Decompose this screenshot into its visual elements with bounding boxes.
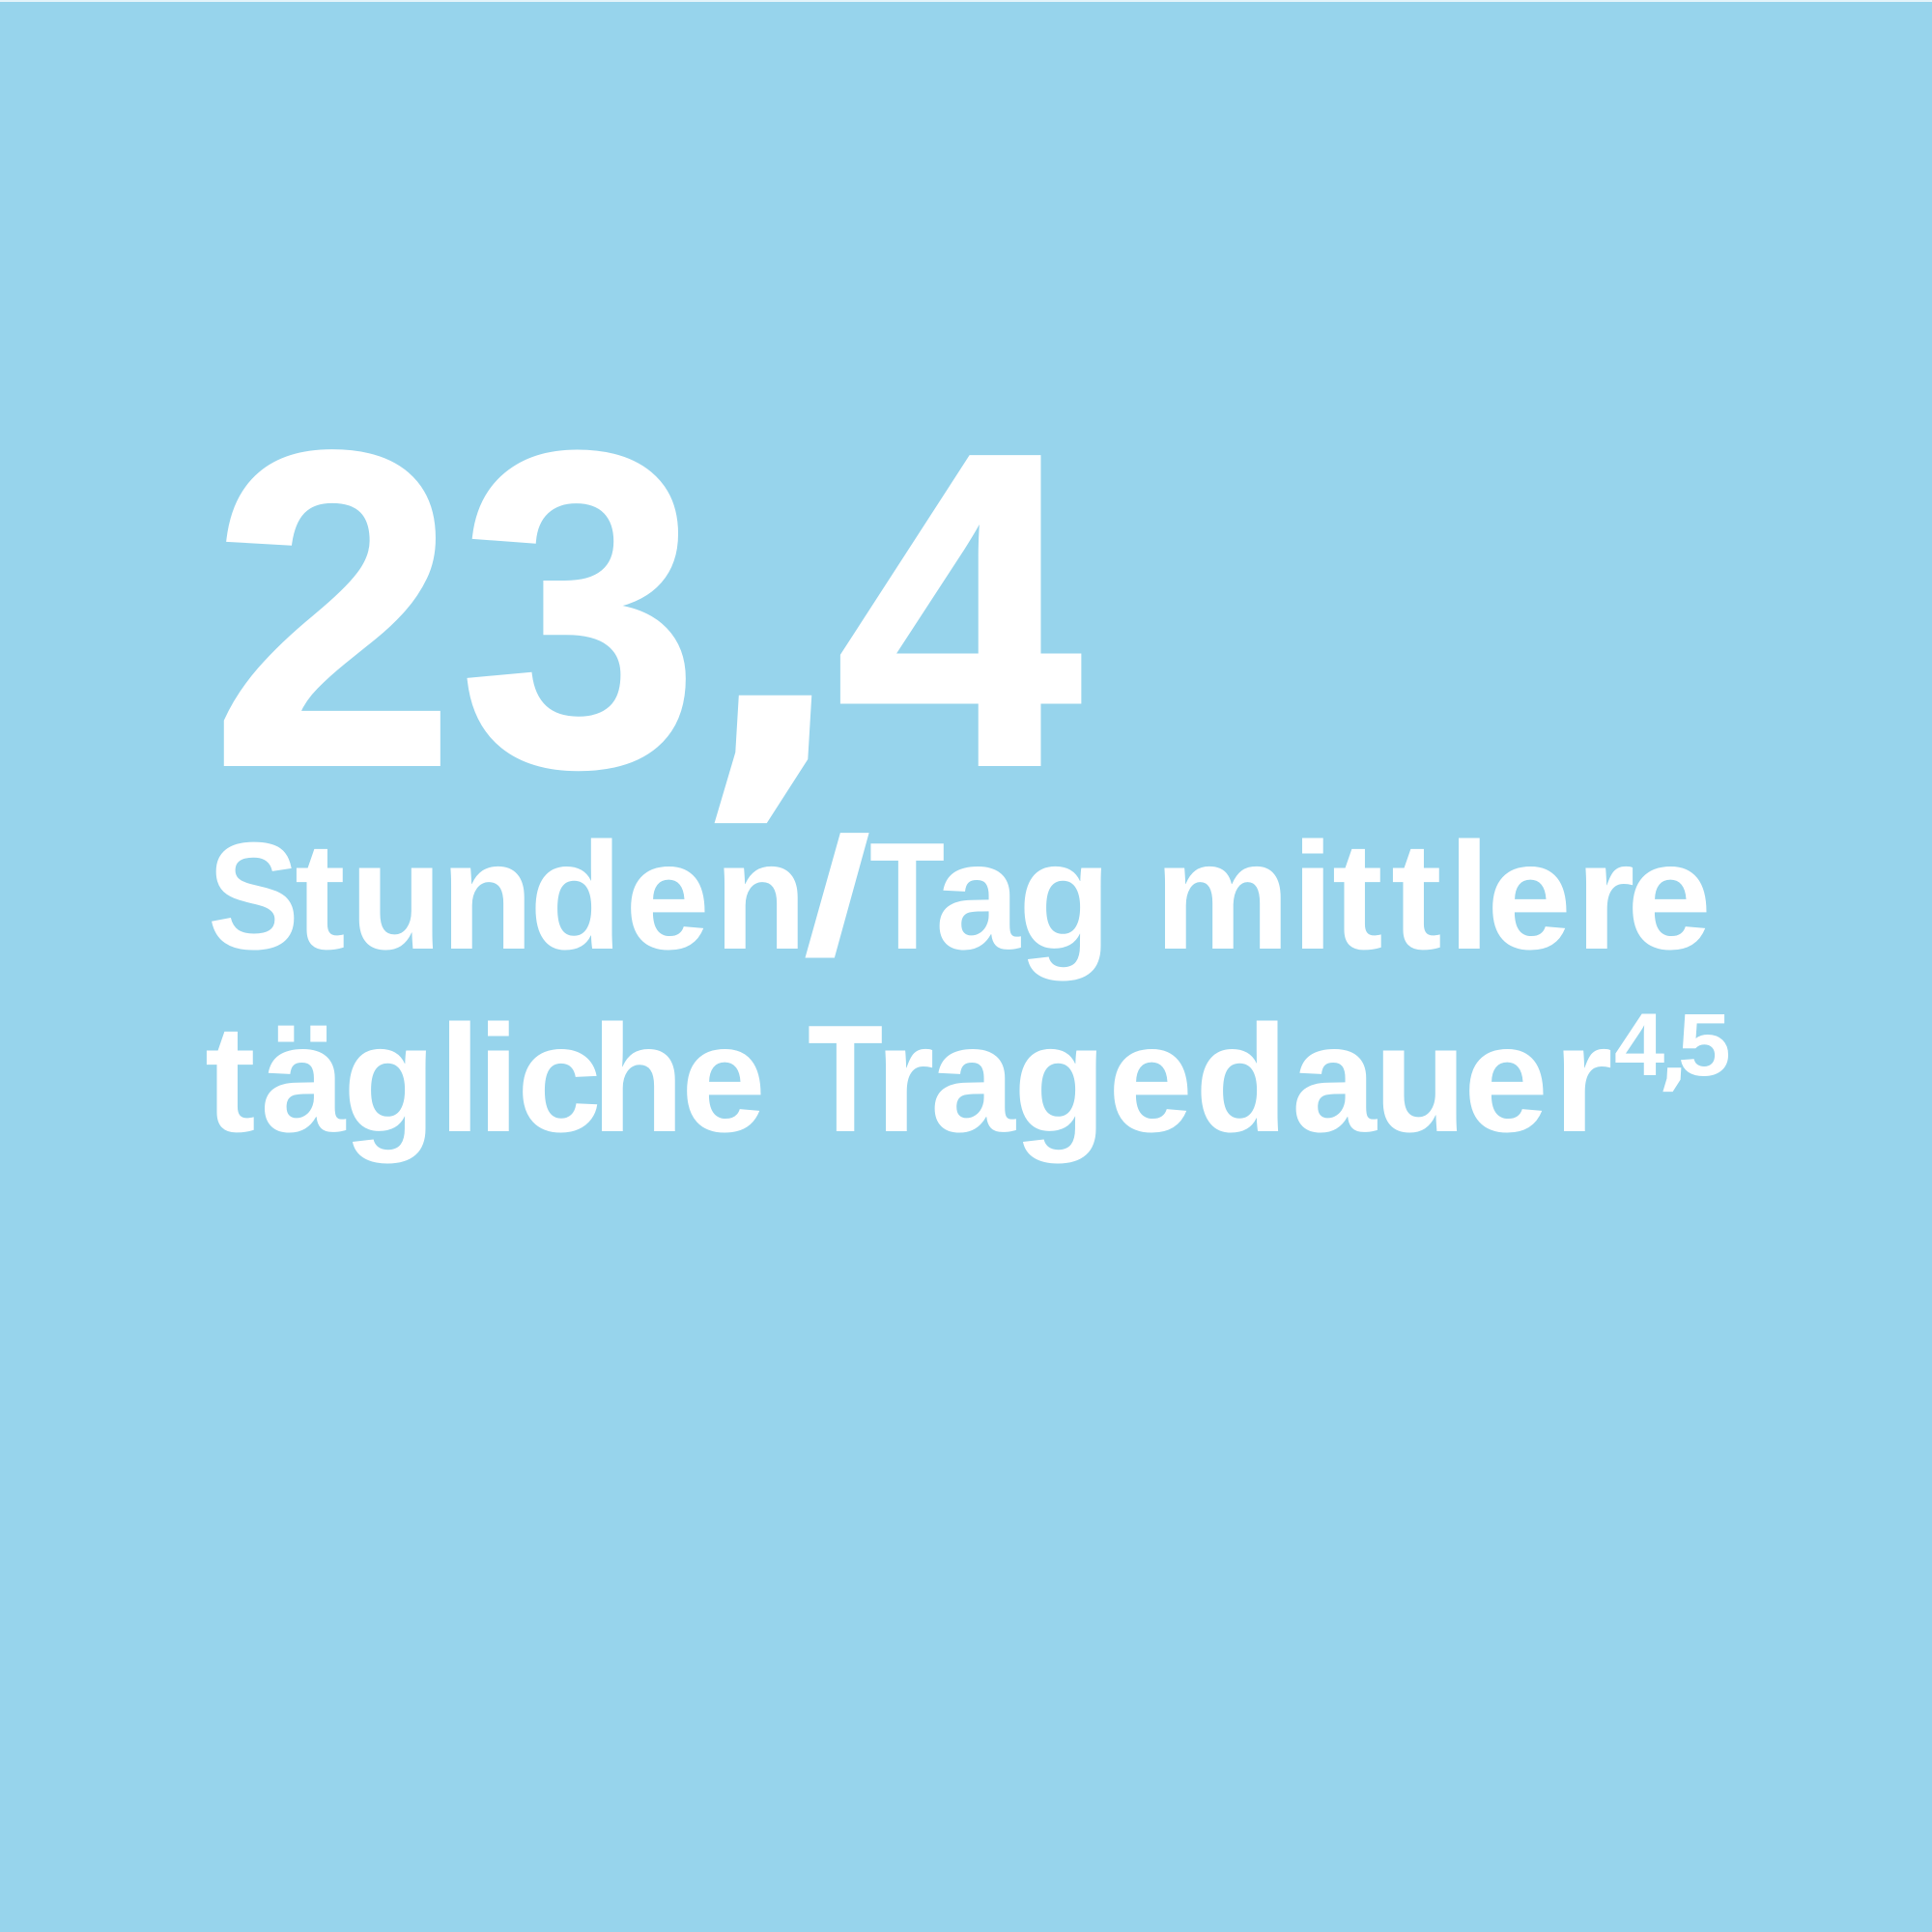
line 1: T: T [869,811,945,981]
digit 2: 2 [211,360,456,859]
line 2: tägliche: tägliche [205,994,766,1164]
footnote comma: , [1663,1031,1686,1094]
line 2: T: T [808,994,883,1164]
line 1: tunden: tunden [295,811,808,981]
line 2: ragedauer: ragedauer [875,994,1613,1164]
line 1: S: S [208,810,299,981]
line 1: ag mittlere: ag mittlere [935,811,1712,981]
decimal comma: , [719,497,836,835]
digit 3: 3 [460,360,698,859]
digit 4: 4 [837,362,1084,859]
footnote 5: 5 [1678,996,1731,1094]
big number: 23,4 [211,360,1084,859]
slash: / [803,803,871,990]
description text [205,803,1731,1164]
footnote 4: 4 [1614,995,1665,1094]
footnote reference 4,5 [1614,995,1731,1094]
